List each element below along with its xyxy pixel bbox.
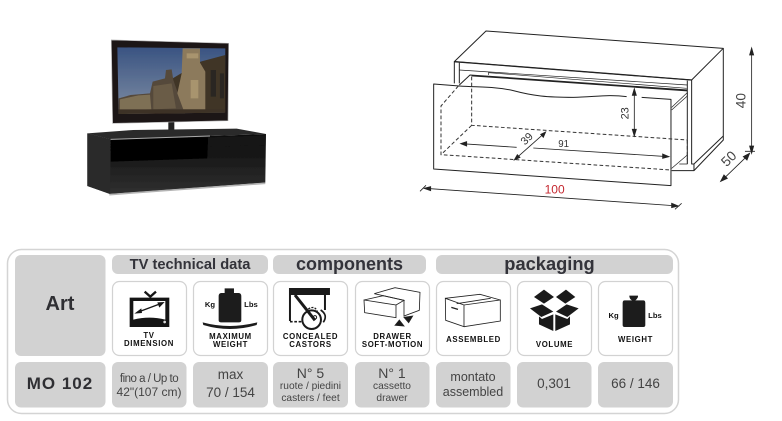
icon card: drawer soft-motion: SOFT-MOTION [362,340,423,349]
TV screen [117,47,225,114]
spec table panel [8,250,678,414]
icon card: concealed castors: CASTORS [289,340,332,349]
icon card: drawer soft-motion [356,282,430,356]
value: drawer: cassetto [373,381,411,392]
value: drawer: drawer [376,393,408,404]
dimension 91: 91 [558,139,569,150]
icon card: weight: WEIGHT [618,335,653,344]
Art heading cell: Art [46,293,75,315]
icon card: concealed castors [274,282,348,356]
value: max weight [193,362,268,408]
value: assembled: montato [450,370,496,384]
drawer front fill [434,84,671,186]
icon card: weight: Lbs [648,311,662,320]
icon card: TV dimension: TV [143,331,155,340]
heading: TV technical data: TV technical data [130,257,251,273]
drawer front outline [434,84,671,186]
icon card: maximum weight: Lbs [244,300,258,309]
value: max weight: 70 / 154 [206,385,255,400]
value: TV size [112,362,186,408]
icon card: TV dimension: DIMENSION [124,339,174,348]
dashed drawer interior [441,77,687,170]
model cell [15,362,106,408]
icon card: volume [518,282,592,356]
icon card: maximum weight: WEIGHT [213,340,248,349]
value: drawer [355,362,430,408]
value: assembled [436,362,510,408]
value: package weight [598,362,673,408]
table outer border [8,250,678,414]
value: drawer: N° 1 [378,365,406,381]
heading: components: components [296,254,403,274]
value: volume: 0,301 [537,376,571,391]
arrows [420,48,755,209]
technical drawing with dimensions [420,31,755,209]
icon card: concealed castors: CONCEALED [283,332,338,341]
dimension 23: 23 [619,107,631,119]
heading: TV technical data [112,255,268,274]
cabinet [87,129,266,195]
value: castors: N° 5 [297,365,324,381]
heading: components [273,254,426,274]
value: volume [517,362,592,408]
heading: packaging: packaging [504,253,595,274]
dimension 40: 40 [733,93,748,108]
icon card: drawer soft-motion: DRAWER [373,332,412,341]
icon card: maximum weight: Kg [205,300,215,309]
icon card: maximum weight [194,282,268,356]
dimension 100: 100 [545,183,565,197]
value: castors [273,362,348,408]
value: TV size: 42"(107 cm) [117,385,181,399]
icon card: volume: VOLUME [536,340,573,349]
icon card: maximum weight: MAXIMUM [209,332,252,341]
Art heading cell [15,255,106,356]
icon card: assembled [436,282,510,356]
value: package weight: 66 / 146 [611,376,660,391]
icon card: weight: Kg [609,311,619,320]
icon card: TV dimension [112,282,186,356]
icon card: weight [598,282,672,356]
heading: packaging [436,253,673,274]
value: TV size: fino a / Up to [120,373,178,385]
TV frame [111,40,229,123]
value: max weight: max [218,367,243,382]
cabinet outline [454,31,723,171]
value: castors: ruote / piedini [280,381,341,392]
product photo: TV on black cabinet [87,40,266,195]
model cell: MO 102 [27,374,93,393]
value: assembled: assembled [443,385,503,399]
value: castors: casters / feet [281,393,340,404]
dimension 39: 39 [519,131,536,148]
dimension 50: 50 [718,148,740,169]
icon card: assembled: ASSEMBLED [446,335,501,344]
TV stand [133,122,210,135]
